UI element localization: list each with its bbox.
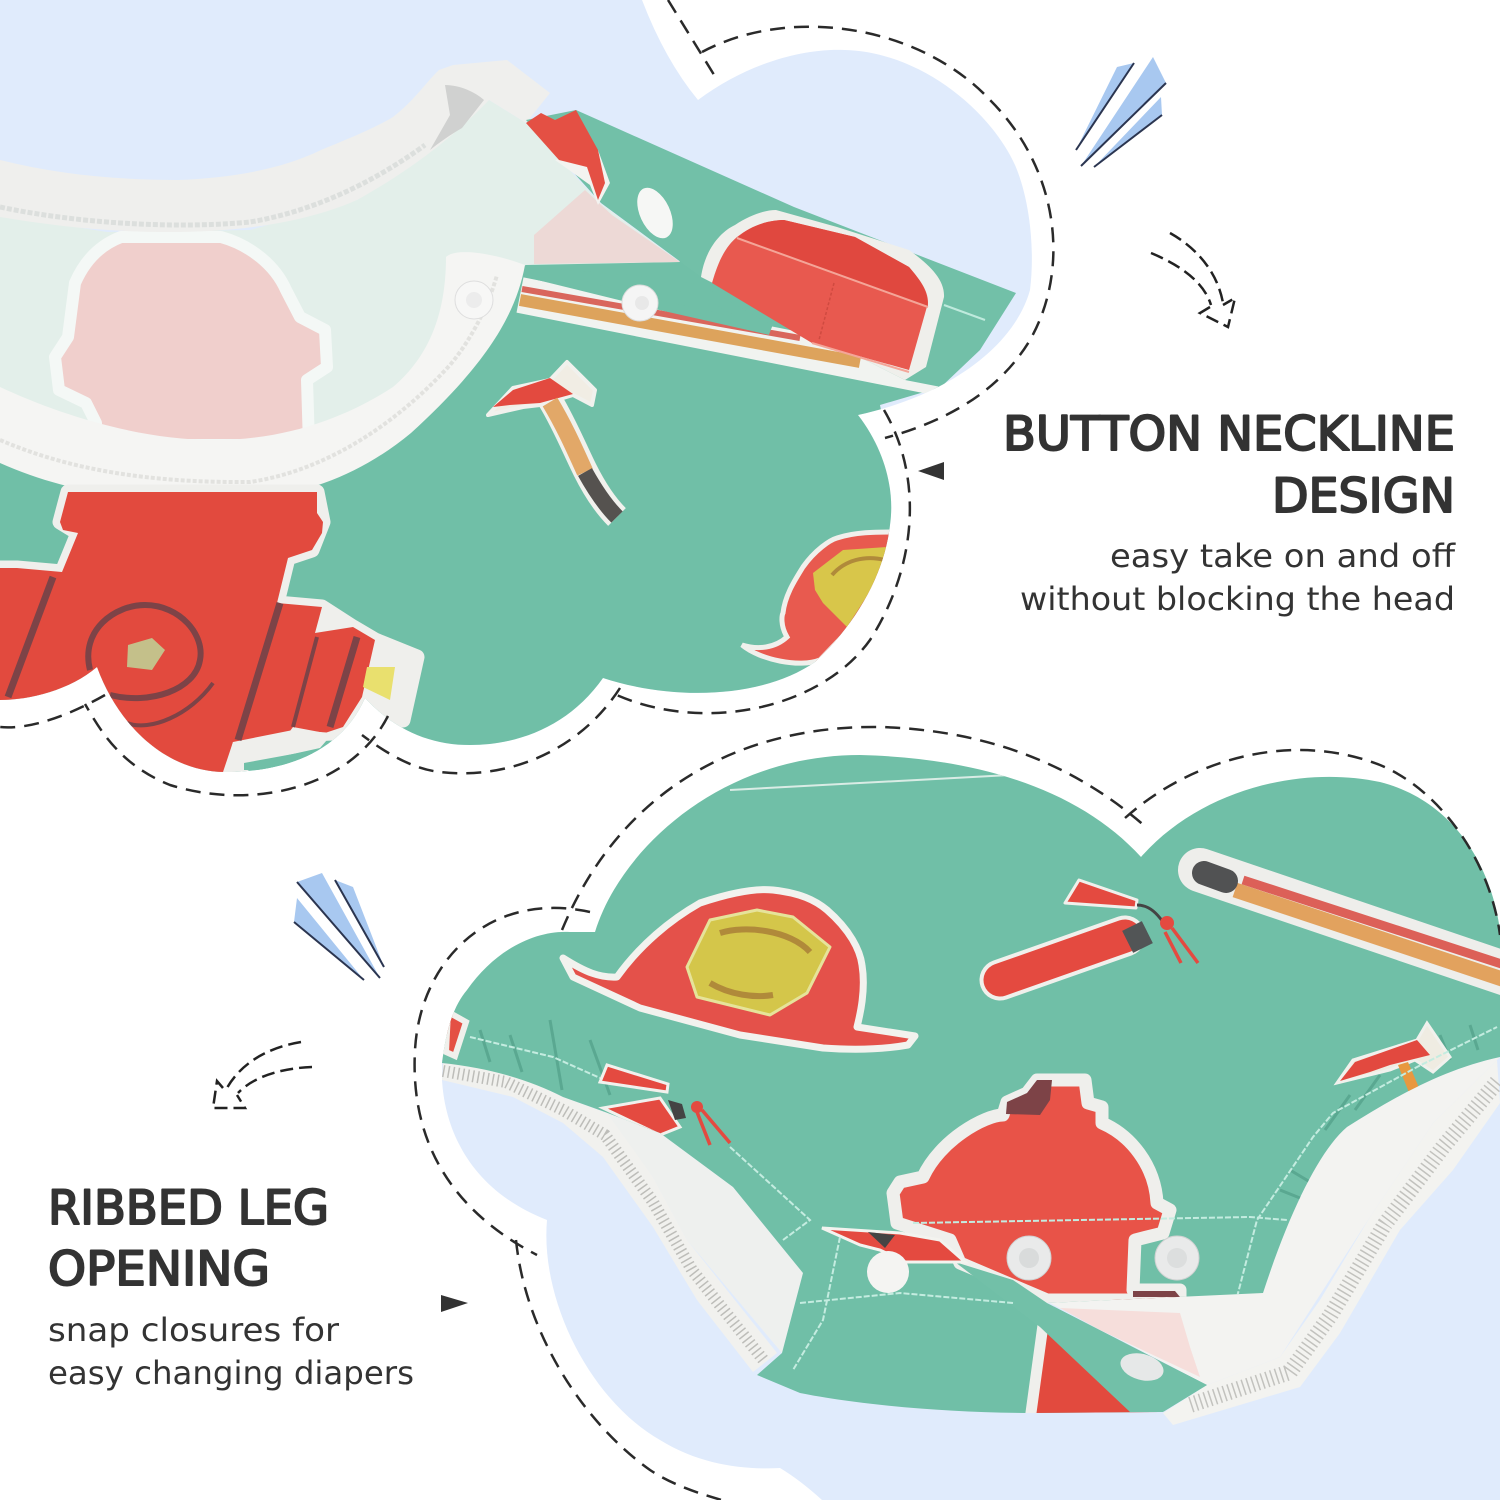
axe print, small right [1337,1023,1450,1095]
left edge print [446,1012,466,1056]
dashed outline: top cloud [0,0,1053,795]
garment: neckline close-up [0,60,1016,800]
panel: top cloud close-up of neckline [0,0,1053,800]
elastic gathers [480,1020,1478,1200]
ghost hydrant seen through fabric [55,237,327,445]
hose print [520,272,940,378]
icon: paper plane, lower left [294,873,384,980]
front collar [0,252,525,502]
seam line [730,775,1010,790]
helmet print [563,890,915,1049]
shoulder fragment print [526,110,610,205]
fire hydrant print [893,1080,1180,1300]
garment interior [0,100,680,424]
snap button [1007,1236,1051,1280]
description line 1: snap closures for [48,1311,340,1349]
heading: RIBBED LEG [48,1181,329,1236]
inner lining, left [605,1112,803,1353]
placket red print [822,1228,965,1262]
snap button [1117,1349,1167,1385]
snap button [455,281,493,319]
pink print through lining [1060,1308,1200,1377]
arrow: curved dashed, top right [1151,233,1235,327]
helmet print on flap [701,210,985,380]
pointer triangle, bottom [441,1295,468,1312]
pointer triangle, top [918,462,944,480]
shoulder flap [526,110,1016,387]
axe print [488,362,617,517]
cloud background: top [0,0,1032,772]
ghost fabric behind flap [534,190,680,264]
description line 2: without blocking the head [1020,580,1455,618]
description line 1: easy take on and off [1110,537,1456,575]
hydrant print, lower part [1030,1325,1165,1420]
snap button [867,1251,909,1293]
back collar [0,60,550,232]
garment: leg opening close-up [430,740,1500,1430]
ribbed edge, right [1163,1060,1500,1425]
extinguisher print [1000,880,1198,980]
white dot print [637,188,673,238]
heading line 2: DESIGN [1272,469,1455,524]
description line 2: easy changing diapers [48,1354,414,1392]
stitching [470,1027,1497,1370]
heading: BUTTON NECKLINE [1003,407,1455,462]
heading line 2: OPENING [48,1242,270,1297]
snap button [1155,1236,1199,1280]
cloud background: bottom [442,1000,1500,1500]
panel: bottom cloud close-up of leg opening [415,727,1500,1500]
text block: ribbed leg opening [48,1181,414,1392]
helmet print, right [742,532,895,663]
extinguisher print, small left [600,1065,730,1145]
snap button [622,285,658,321]
inner lining, right [1050,1057,1500,1385]
fire hydrant print, large [0,492,417,800]
icon: paper plane, top right [1076,57,1166,167]
front placket [955,1262,1207,1412]
text block: button neckline [1003,407,1456,618]
hose print [1200,870,1500,985]
arrow: curved dashed, lower left [213,1042,312,1108]
dashed outline: bottom cloud [415,727,1500,1500]
ribbed edge, left [442,1063,777,1372]
